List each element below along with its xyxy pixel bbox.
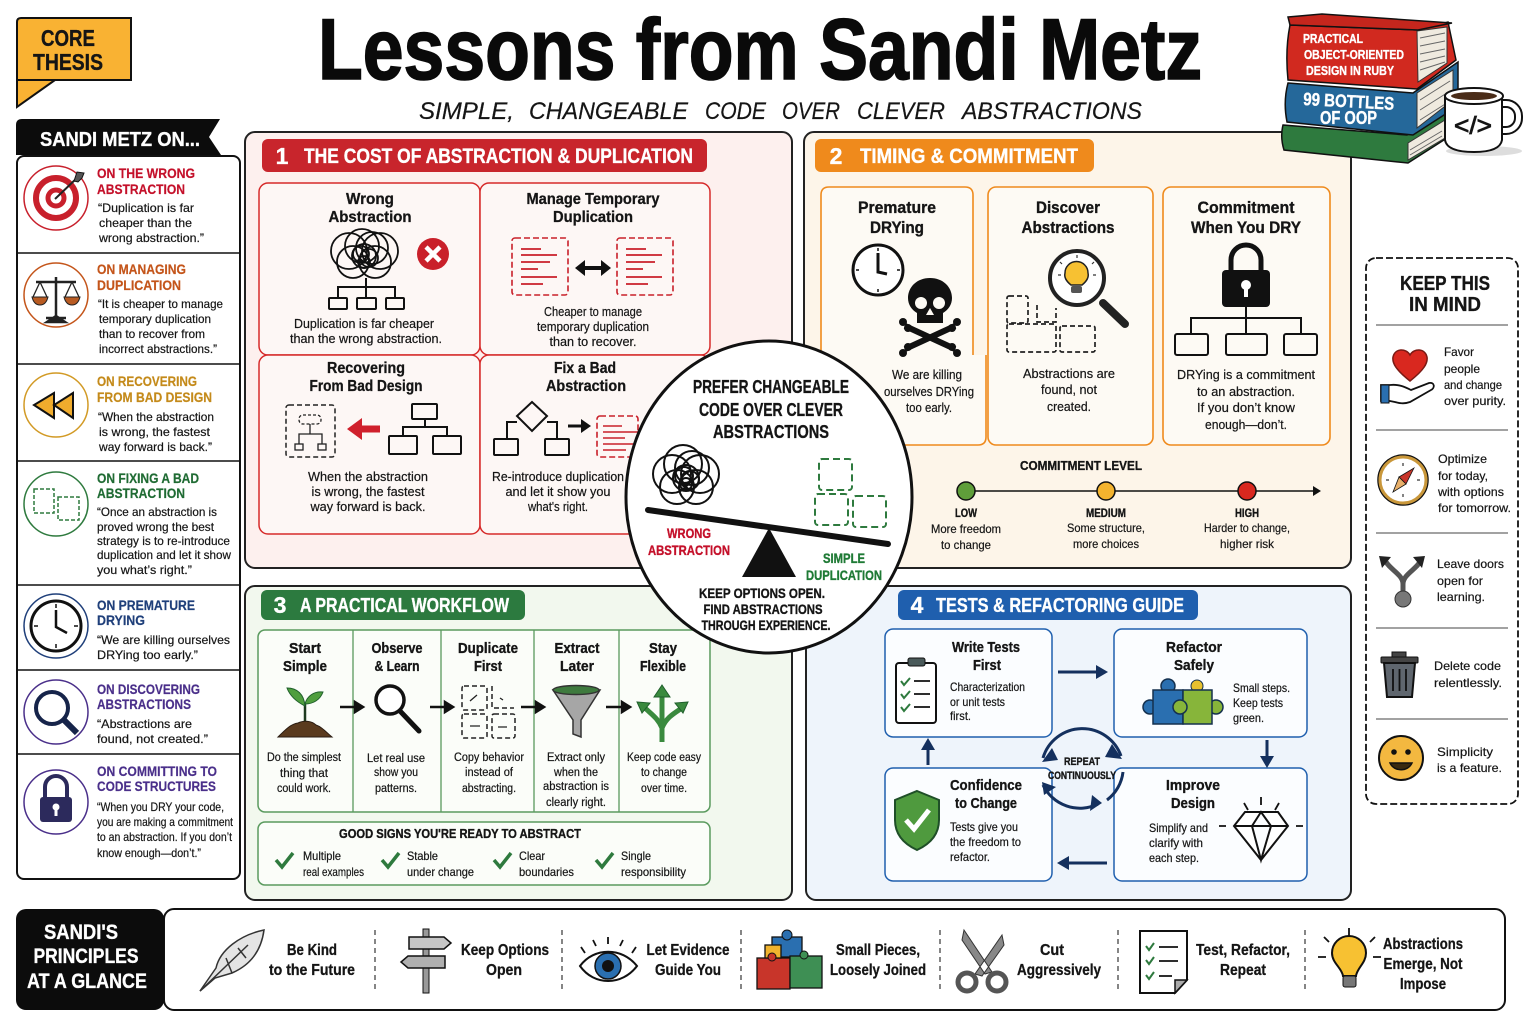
principle: let evidence guide you: Guide You xyxy=(655,962,721,979)
quote: premature drying: ON PREMATURE xyxy=(97,598,195,613)
step: duplicate first: instead of xyxy=(465,767,514,779)
principle: be kind xyxy=(200,930,355,991)
quote: wrong abstraction xyxy=(24,166,204,245)
quote: committing to code structures: CODE STRUCTURES xyxy=(97,779,216,794)
step: extract later: Extract only xyxy=(547,752,605,764)
step: start simple: Start xyxy=(289,640,321,657)
quote: committing to code structures: you are making a commitment xyxy=(97,815,234,829)
badge: core thesis: CORE xyxy=(41,25,95,51)
card: recovering from bad design: From Bad Design xyxy=(310,378,422,395)
quote: recovering from bad design xyxy=(24,373,214,454)
step: observe and learn: patterns. xyxy=(375,783,417,795)
cycle: repeat continuously: CONTINUOUSLY xyxy=(1048,770,1117,782)
center callout: prefer changeable code: SIMPLE xyxy=(823,550,865,566)
card: refactor safely: Keep tests xyxy=(1233,696,1283,710)
step: stay flexible: to change xyxy=(641,767,687,779)
step: stay flexible: Keep code easy xyxy=(627,752,701,764)
card: premature drying: ourselves DRYing xyxy=(884,385,974,399)
tip: simplicity: Simplicity xyxy=(1437,745,1493,759)
chart: commitment level timeline: More freedom xyxy=(931,522,1001,536)
card: confidence to change xyxy=(885,768,1052,881)
subtitle: OVER xyxy=(782,98,840,125)
principle: let evidence guide you: Let Evidence xyxy=(646,942,730,959)
quote: premature drying: DRYING xyxy=(97,613,145,628)
card: commitment when you DRY: If you don’t know xyxy=(1197,401,1296,415)
panel 4: tests and refactoring guide xyxy=(806,586,1351,900)
step: observe and learn: Let real use xyxy=(367,753,425,765)
tip: optimize for today: for tomorrow. xyxy=(1438,501,1511,515)
step: stay flexible xyxy=(627,640,701,795)
tip: optimize for today: Optimize xyxy=(1438,452,1487,466)
center callout: prefer changeable code: ABSTRACTION xyxy=(648,542,730,558)
quote: committing to code structures: ON COMMITTING TO xyxy=(97,764,217,779)
principle: keep options open xyxy=(401,929,549,993)
card: good signs xyxy=(258,822,710,885)
badge: core thesis xyxy=(17,18,131,107)
panel: keep this in mind: IN MIND xyxy=(1409,294,1481,316)
quote: recovering from bad design: “When the abstraction xyxy=(98,410,214,424)
principle: be kind: Be Kind xyxy=(287,942,337,959)
step: duplicate first: First xyxy=(474,658,502,675)
card: manage temporary duplication: temporary duplication xyxy=(537,320,649,334)
card: manage temporary duplication: Manage Temporary xyxy=(526,191,660,208)
badge: core thesis: THESIS xyxy=(33,49,103,75)
card: write tests first: Write Tests xyxy=(952,639,1020,656)
chart: commitment level timeline: higher risk xyxy=(1220,537,1275,551)
center callout: prefer changeable code: ABSTRACTIONS xyxy=(713,422,829,442)
chart: commitment level timeline: MEDIUM xyxy=(1086,508,1126,520)
chart: commitment level timeline xyxy=(931,458,1321,552)
card: improve design: Simplify and xyxy=(1149,821,1208,835)
card: refactor safely: Small steps. xyxy=(1233,681,1290,695)
quote: discovering abstractions: “Abstractions are xyxy=(97,717,192,731)
card: recovering from bad design xyxy=(259,355,480,534)
quote: recovering from bad design: FROM BAD DESIGN xyxy=(97,390,212,405)
card: wrong abstraction: Wrong xyxy=(346,191,394,208)
card: write tests first: first. xyxy=(950,709,971,723)
icon: tangled scribble xyxy=(653,445,719,504)
quote: managing duplication: than to recover from xyxy=(99,327,205,341)
card: refactor safely: green. xyxy=(1233,711,1264,725)
quote: discovering abstractions: found, not created.” xyxy=(97,732,208,746)
card: premature drying xyxy=(821,187,986,445)
principle: keep options open: Keep Options xyxy=(461,942,549,959)
quote: premature drying xyxy=(24,594,230,662)
step: extract later: abstraction is xyxy=(543,781,609,793)
tip: optimize for today: with options xyxy=(1437,485,1504,499)
principle: keep options open: Open xyxy=(486,962,522,979)
panel: principles at a glance xyxy=(16,909,1505,1010)
card: fix a bad abstraction xyxy=(480,355,710,534)
step: extract later: Extract xyxy=(554,640,600,657)
card: improve design xyxy=(1114,768,1307,881)
quote: fixing a bad abstraction: “Once an abstraction is xyxy=(97,505,217,519)
subtitle xyxy=(419,98,1142,125)
card: fix a bad abstraction: Re-introduce duplication xyxy=(492,470,624,484)
quote: fixing a bad abstraction: strategy is to re-introduce xyxy=(97,534,230,548)
tip: optimize for today: for today, xyxy=(1438,469,1488,483)
quote: wrong abstraction: ON THE WRONG xyxy=(97,166,195,181)
quote: wrong abstraction: wrong abstraction.” xyxy=(98,231,204,245)
principle: abstractions emerge: Abstractions xyxy=(1383,936,1463,953)
heading: section 3: A PRACTICAL WORKFLOW xyxy=(300,595,509,617)
center callout: prefer changeable code: CODE OVER CLEVER xyxy=(699,400,843,420)
card: commitment when you DRY xyxy=(1163,187,1330,445)
icon: stacked books and coffee mug: DESIGN IN RUBY xyxy=(1306,63,1394,78)
icon: stacked books and coffee mug xyxy=(1282,14,1522,163)
step: extract later: Later xyxy=(560,658,594,675)
card: manage temporary duplication: than to recover. xyxy=(550,335,636,349)
card: discover abstractions: Discover xyxy=(1036,198,1100,217)
card: good signs: Multiple xyxy=(303,849,341,863)
chart: commitment level timeline: LOW xyxy=(955,508,977,520)
card: commitment when you DRY: Commitment xyxy=(1198,198,1295,217)
center callout: prefer changeable code: THROUGH EXPERIENCE. xyxy=(702,618,830,633)
principle: be kind: to the Future xyxy=(269,962,355,979)
card: improve design: Design xyxy=(1171,795,1215,812)
card: good signs: Clear xyxy=(519,849,545,863)
center callout: prefer changeable code: PREFER CHANGEABLE xyxy=(693,377,849,397)
quote: managing duplication: incorrect abstractions.” xyxy=(99,342,217,356)
icon: balance scale seesaw xyxy=(648,510,888,577)
quote: managing duplication: ON MANAGING xyxy=(97,262,186,277)
principle: cut aggressively: Aggressively xyxy=(1017,962,1101,979)
step: duplicate first: Copy behavior xyxy=(454,752,524,764)
step: extract later: when the xyxy=(553,767,598,779)
quote: recovering from bad design: is wrong, the fastest xyxy=(99,425,211,439)
tip: delete code: Delete code xyxy=(1434,659,1501,673)
icon: stacked books and coffee mug: OBJECT-ORIENTED xyxy=(1304,47,1404,62)
quote: recovering from bad design: way forward is back.” xyxy=(98,440,212,454)
quote: fixing a bad abstraction: proved wrong the best xyxy=(97,520,215,534)
arrows between steps xyxy=(340,702,630,712)
heading: section 1: THE COST OF ABSTRACTION & DUPLICATION xyxy=(304,145,693,168)
step: start simple: Simple xyxy=(283,658,327,675)
cycle: repeat continuously xyxy=(1042,729,1123,811)
step: extract later xyxy=(543,640,609,809)
center callout: prefer changeable code xyxy=(626,341,912,653)
quote: fixing a bad abstraction: you what’s right.” xyxy=(97,563,192,577)
label: principles heading xyxy=(16,909,164,1010)
tip: delete code xyxy=(1381,652,1502,697)
heading: section 4: TESTS & REFACTORING GUIDE xyxy=(936,595,1184,617)
subtitle: CLEVER xyxy=(857,98,945,125)
label: principles heading: SANDI'S xyxy=(44,921,118,944)
card: good signs: real examples xyxy=(303,865,364,879)
card: manage temporary duplication: Cheaper to manage xyxy=(544,305,642,319)
center callout: prefer changeable code: KEEP OPTIONS OPEN. xyxy=(699,586,825,601)
principle: abstractions emerge xyxy=(1318,928,1463,993)
card: improve design: each step. xyxy=(1149,851,1199,865)
card: fix a bad abstraction: Fix a Bad xyxy=(554,360,616,377)
heading: section 2: TIMING & COMMITMENT xyxy=(860,145,1078,168)
card: refactor safely: Refactor xyxy=(1166,639,1222,656)
subtitle: SIMPLE, xyxy=(419,98,514,125)
panel 1: cost of abstraction and duplication xyxy=(245,132,792,568)
quote: managing duplication: temporary duplication xyxy=(99,312,211,326)
card: write tests first: or unit tests xyxy=(950,695,1005,709)
tip: leave doors open: open for xyxy=(1437,574,1483,588)
tip: leave doors open xyxy=(1379,556,1504,607)
step: observe and learn: & Learn xyxy=(374,658,420,675)
step: start simple: thing that xyxy=(280,768,329,780)
quote: recovering from bad design: ON RECOVERING xyxy=(97,374,197,389)
principle: small pieces loosely joined xyxy=(757,930,926,989)
card: commitment when you DRY: to an abstraction. xyxy=(1197,385,1295,399)
card: wrong abstraction xyxy=(259,183,480,355)
quote: discovering abstractions: ON DISCOVERING xyxy=(97,682,200,697)
card: discover abstractions xyxy=(988,187,1153,445)
card: premature drying: Premature xyxy=(858,198,936,217)
quote: committing to code structures: “When you DRY your code, xyxy=(97,800,224,814)
card: fix a bad abstraction: what's right. xyxy=(527,500,588,514)
card: premature drying: too early. xyxy=(906,401,952,415)
step: extract later: clearly right. xyxy=(546,797,606,809)
step: start simple xyxy=(267,640,342,795)
heading: section 4: 4 xyxy=(911,592,924,618)
heading: Sandi Metz on xyxy=(16,119,221,155)
card: premature drying: DRYing xyxy=(870,218,924,237)
heading: section 1: 1 xyxy=(276,143,289,169)
card: write tests first xyxy=(885,629,1052,737)
tip: optimize for today xyxy=(1378,452,1511,515)
step: start simple: Do the simplest xyxy=(267,752,342,764)
center callout: prefer changeable code: DUPLICATION xyxy=(806,567,882,583)
quote: wrong abstraction: ABSTRACTION xyxy=(97,182,185,197)
chart: commitment level timeline: HIGH xyxy=(1235,508,1259,520)
step: duplicate first xyxy=(454,640,524,795)
principle: abstractions emerge: Impose xyxy=(1400,976,1446,993)
tip: leave doors open: learning. xyxy=(1437,590,1485,604)
heading: section 2 xyxy=(815,139,1094,172)
principle: test refactor repeat: Repeat xyxy=(1220,962,1267,979)
arrows between test cards xyxy=(921,665,1274,870)
quote: wrong abstraction: “Duplication is far xyxy=(98,201,194,215)
principle: test refactor repeat: Test, Refactor, xyxy=(1196,942,1290,959)
heading: section 3 xyxy=(261,590,525,620)
center callout: prefer changeable code: FIND ABSTRACTIONS xyxy=(704,602,822,617)
step: duplicate first: abstracting. xyxy=(462,783,516,795)
card: wrong abstraction: Abstraction xyxy=(328,209,412,226)
card: good signs: boundaries xyxy=(519,865,574,879)
chart: commitment level timeline: COMMITMENT LEVEL xyxy=(1020,458,1142,473)
quote: premature drying: “We are killing ourselves xyxy=(97,633,230,647)
heading: Sandi Metz on: SANDI METZ ON... xyxy=(40,129,200,151)
card: commitment when you DRY: DRYing is a commitment xyxy=(1177,368,1316,382)
icon: stacked books and coffee mug: OF OOP xyxy=(1320,108,1377,128)
step: observe and learn: Observe xyxy=(372,640,422,657)
quote: discovering abstractions xyxy=(24,680,208,746)
heading: section 1 xyxy=(262,139,707,172)
quote: committing to code structures: know enough—don’t.” xyxy=(97,846,201,860)
card: good signs: under change xyxy=(407,865,474,879)
icon: stacked books and coffee mug: PRACTICAL xyxy=(1303,31,1363,46)
heading: section 2: 2 xyxy=(830,143,842,169)
quote: fixing a bad abstraction: ABSTRACTION xyxy=(97,486,185,501)
panel 2: timing and commitment xyxy=(804,132,1351,568)
card: write tests first: First xyxy=(973,657,1001,674)
card: good signs: Single xyxy=(621,849,651,863)
tip: favor people xyxy=(1381,345,1506,408)
principle: cut aggressively xyxy=(958,930,1101,991)
quote: managing duplication: DUPLICATION xyxy=(97,278,181,293)
card: premature drying: We are killing xyxy=(892,368,962,382)
chart: commitment level timeline: to change xyxy=(941,538,991,552)
heading: section 4 xyxy=(898,590,1198,620)
panel 3: practical workflow xyxy=(245,586,792,900)
card: discover abstractions: Abstractions xyxy=(1022,218,1114,237)
panel: keep this in mind xyxy=(1366,258,1518,804)
label: principles heading: AT A GLANCE xyxy=(27,970,147,993)
principle: test refactor repeat xyxy=(1140,931,1290,993)
quote: wrong abstraction: cheaper than the xyxy=(99,216,192,230)
quote: managing duplication xyxy=(24,262,223,356)
step: stay flexible: Flexible xyxy=(640,658,686,675)
card: fix a bad abstraction: Abstraction xyxy=(546,378,626,395)
step: stay flexible: over time. xyxy=(641,783,687,795)
card: refactor safely xyxy=(1114,629,1307,737)
tip: simplicity: is a feature. xyxy=(1437,761,1502,775)
card: recovering from bad design: way forward is back. xyxy=(309,500,426,514)
card: commitment when you DRY: When You DRY xyxy=(1191,218,1302,237)
card: improve design: Improve xyxy=(1166,777,1220,794)
chart: commitment level timeline: Harder to change, xyxy=(1204,521,1290,535)
card: recovering from bad design: is wrong, the fastest xyxy=(312,485,425,499)
title: Lessons from Sandi Metz xyxy=(318,2,1202,98)
card: good signs: responsibility xyxy=(621,865,686,879)
card: confidence to change: the freedom to xyxy=(950,835,1021,849)
card: good signs: Stable xyxy=(407,849,438,863)
card: commitment when you DRY: enough—don’t. xyxy=(1205,418,1287,432)
quote: fixing a bad abstraction: duplication and let it show xyxy=(97,548,231,562)
card: fix a bad abstraction: and let it show you xyxy=(506,485,611,499)
chart: commitment level timeline: Some structure, xyxy=(1067,521,1145,535)
tip: delete code: relentlessly. xyxy=(1434,676,1502,690)
tip: favor people: Favor xyxy=(1444,345,1474,359)
panel: keep this in mind: KEEP THIS xyxy=(1400,273,1490,295)
quote: committing to code structures: to an abstraction. If you don’t xyxy=(97,830,233,844)
quote: fixing a bad abstraction: ON FIXING A BAD xyxy=(97,471,199,486)
tip: favor people: and change xyxy=(1444,378,1502,392)
cycle: repeat continuously: REPEAT xyxy=(1064,756,1100,768)
tip: favor people: over purity. xyxy=(1444,394,1506,408)
card: discover abstractions: created. xyxy=(1047,400,1091,414)
card: wrong abstraction: Duplication is far cheaper xyxy=(294,317,434,331)
chart: commitment level timeline: more choices xyxy=(1073,537,1139,551)
card: confidence to change: to Change xyxy=(955,795,1017,812)
heading: section 3: 3 xyxy=(274,592,286,618)
card: good signs: GOOD SIGNS YOU'RE READY TO ABSTRACT xyxy=(339,826,581,841)
step: stay flexible: Stay xyxy=(649,640,678,657)
card: discover abstractions: Abstractions are xyxy=(1023,367,1115,381)
step: start simple: could work. xyxy=(277,783,331,795)
tip: favor people: people xyxy=(1444,362,1480,376)
card: refactor safely: Safely xyxy=(1174,657,1215,674)
icon: stacked books and coffee mug: 99 BOTTLES xyxy=(1303,89,1395,114)
icon: duplicated dashed boxes xyxy=(815,459,886,527)
principle: let evidence guide you xyxy=(580,937,730,981)
quote: managing duplication: “It is cheaper to manage xyxy=(98,297,223,311)
tip: leave doors open: Leave doors xyxy=(1437,557,1504,571)
subtitle: CHANGEABLE xyxy=(529,98,689,125)
card: confidence to change: refactor. xyxy=(950,850,990,864)
principle: small pieces loosely joined: Small Pieces, xyxy=(836,942,920,959)
card: discover abstractions: found, not xyxy=(1041,383,1098,397)
label: principles heading: PRINCIPLES xyxy=(34,945,138,968)
quote: discovering abstractions: ABSTRACTIONS xyxy=(97,697,191,712)
principle: abstractions emerge: Emerge, Not xyxy=(1384,956,1463,973)
card: recovering from bad design: Recovering xyxy=(327,360,405,377)
card: manage temporary duplication: Duplication xyxy=(553,209,633,226)
step: observe and learn xyxy=(367,640,425,795)
principle: small pieces loosely joined: Loosely Joined xyxy=(830,962,926,979)
card: manage temporary duplication xyxy=(480,183,710,355)
tip: simplicity xyxy=(1379,736,1502,780)
principle: cut aggressively: Cut xyxy=(1040,942,1065,959)
quote: fixing a bad abstraction xyxy=(24,471,231,577)
card: write tests first: Characterization xyxy=(950,680,1025,694)
card: recovering from bad design: When the abstraction xyxy=(308,470,428,484)
icon: stacked books and coffee mug: </> xyxy=(1454,112,1492,140)
subtitle: ABSTRACTIONS xyxy=(960,98,1142,125)
card: wrong abstraction: than the wrong abstraction. xyxy=(290,332,442,346)
card: confidence to change: Tests give you xyxy=(950,820,1018,834)
center callout: prefer changeable code: WRONG xyxy=(667,525,711,541)
card: improve design: clarify with xyxy=(1149,836,1203,850)
workflow steps card xyxy=(258,630,710,812)
panel: Sandi Metz quotes xyxy=(17,156,240,879)
card: confidence to change: Confidence xyxy=(950,777,1022,794)
step: duplicate first: Duplicate xyxy=(458,640,518,657)
quote: committing to code structures xyxy=(24,764,234,860)
step: observe and learn: show you xyxy=(374,767,418,779)
subtitle: CODE xyxy=(705,98,767,125)
quote: premature drying: DRYing too early.” xyxy=(97,648,198,662)
